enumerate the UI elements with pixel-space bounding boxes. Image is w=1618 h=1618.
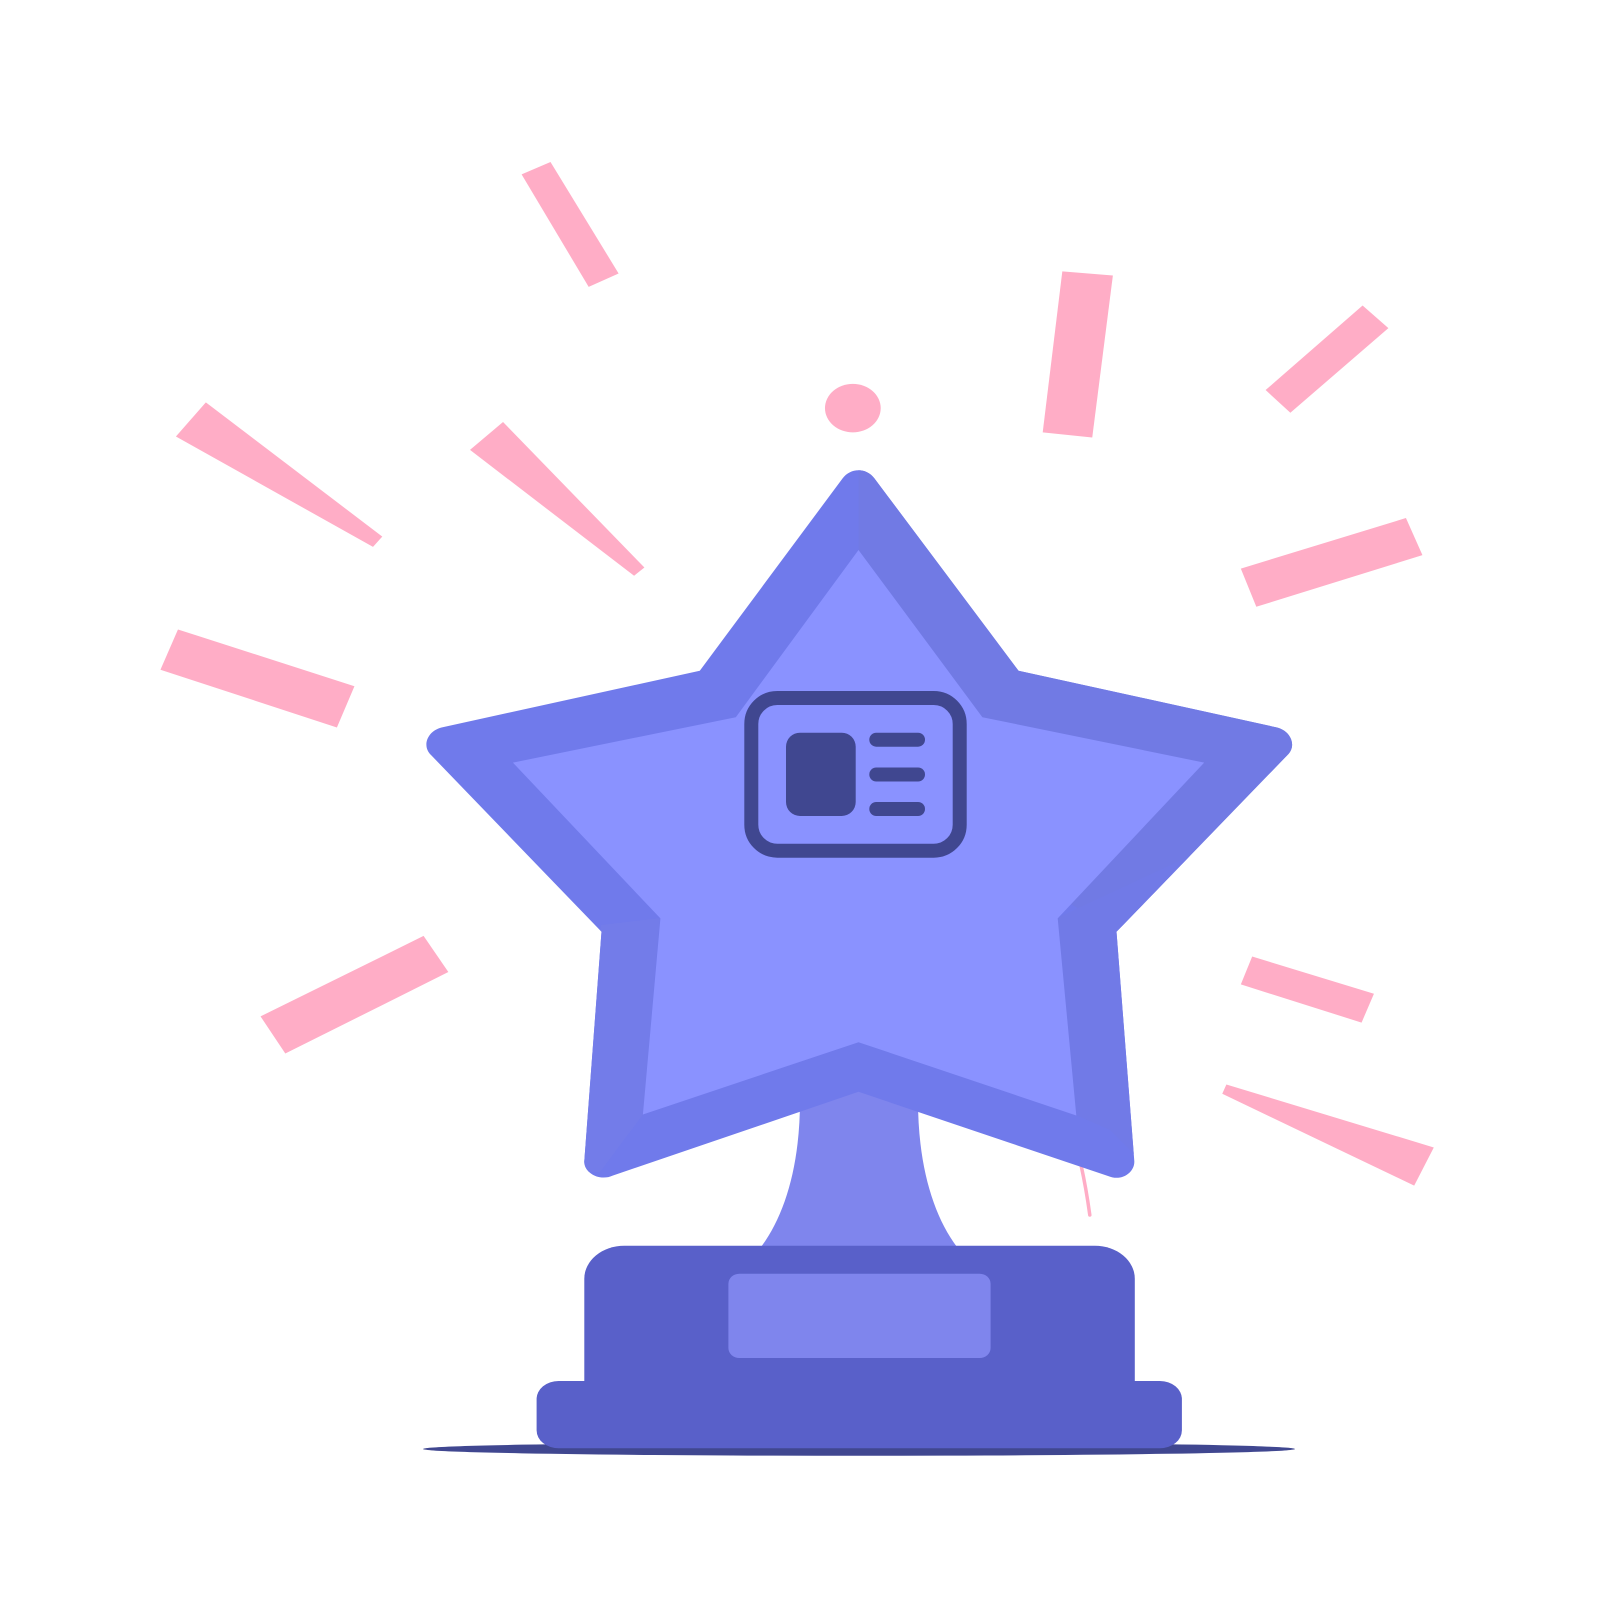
base name plate [728, 1274, 991, 1358]
confetti strip: top right [1043, 271, 1113, 438]
card frame [751, 698, 960, 851]
trophy stem [761, 1085, 957, 1247]
card text line 1 [869, 733, 925, 747]
confetti wedge: inner left [470, 422, 644, 576]
ground shadow [423, 1442, 1295, 1456]
star outer band [426, 470, 1292, 1178]
illustration: star trophy with confetti [160, 162, 1434, 1456]
card text line 2 [869, 768, 925, 782]
confetti strip: left [160, 629, 354, 727]
star inner face [513, 550, 1204, 1116]
confetti burst [160, 162, 1434, 1186]
confetti strip: top left [522, 162, 619, 287]
confetti wedge: bottom right [1222, 1085, 1434, 1186]
confetti strip: right [1241, 518, 1422, 607]
card text line 3 [869, 802, 925, 816]
confetti strip: upper right [1266, 305, 1388, 413]
base upper block [584, 1246, 1135, 1416]
icon: profile card [751, 698, 960, 851]
trophy base [537, 1246, 1182, 1448]
confetti strip: lower right [1241, 957, 1374, 1023]
card photo block [786, 733, 856, 816]
thin pink streamer [1081, 1165, 1090, 1215]
confetti strip: lower left [261, 936, 448, 1054]
confetti wedge: far left [176, 402, 382, 547]
confetti dot [825, 384, 881, 432]
base foot [537, 1381, 1182, 1448]
